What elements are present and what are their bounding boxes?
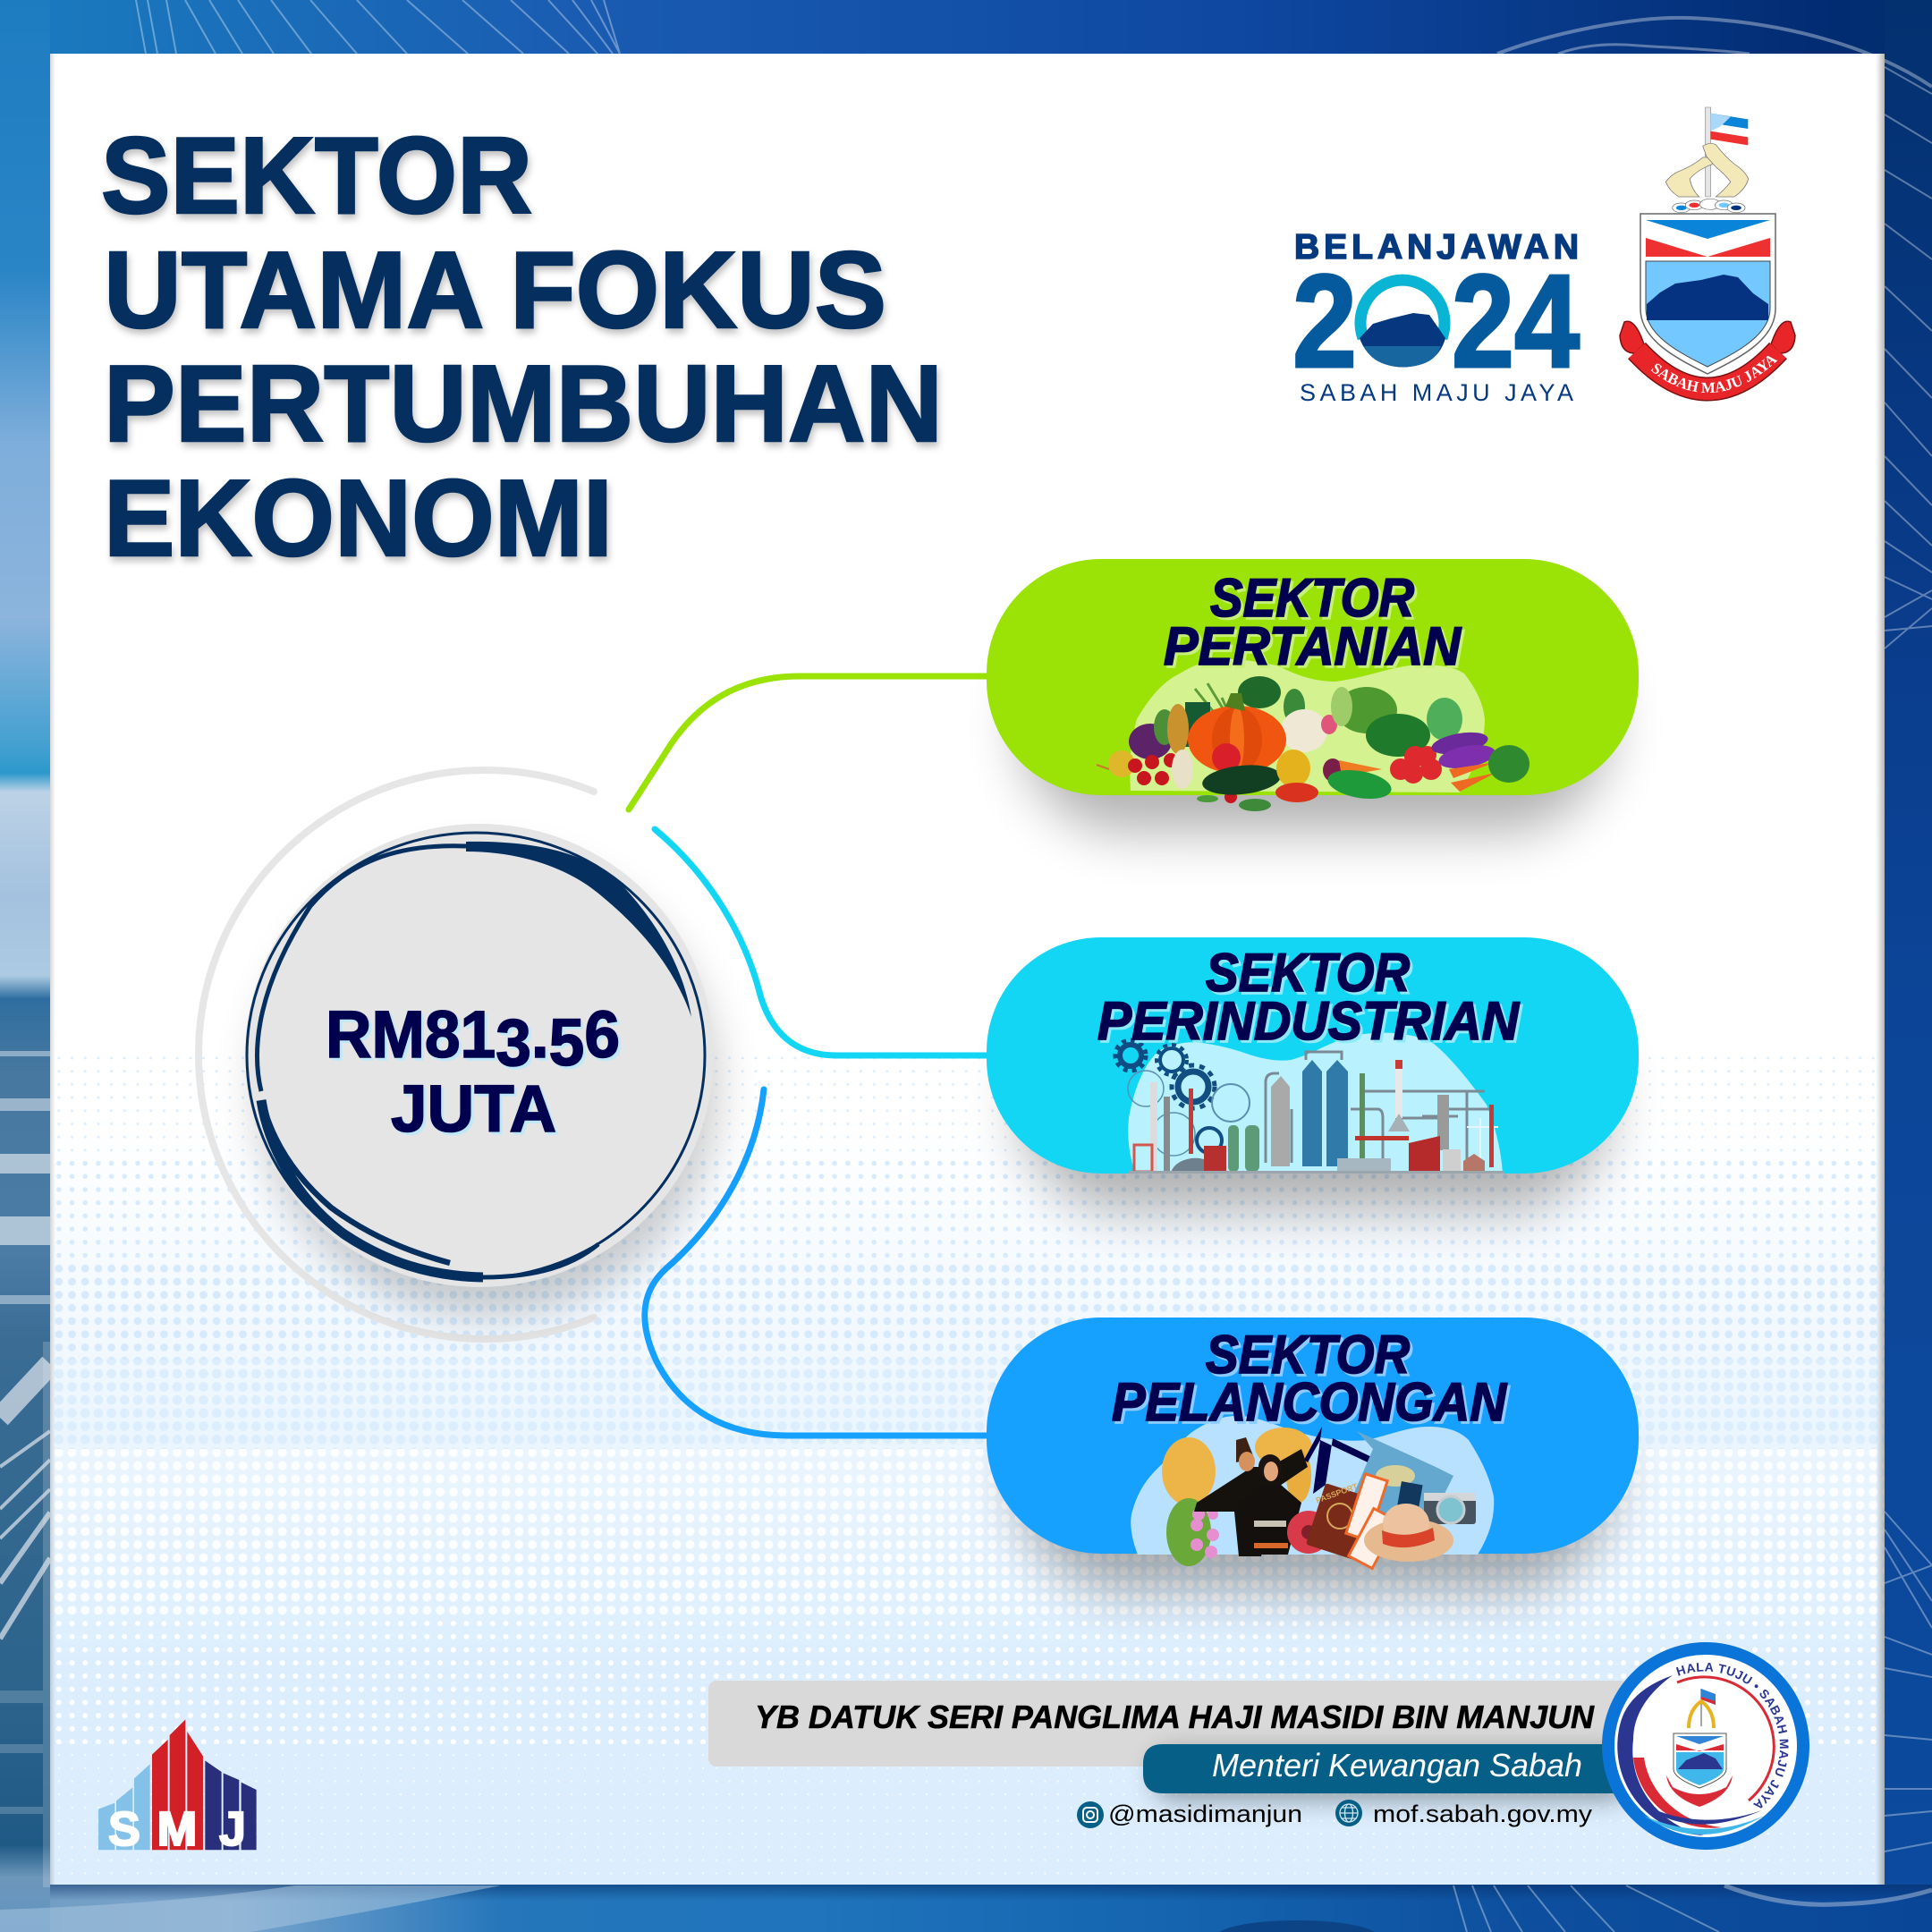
logo: Hala Tuju Sabah Maju Jaya: HALA TUJU • SABAH MAJU JAYA xyxy=(1676,1663,1789,1809)
panel: Sektor Pelancongan: PELANCONGAN xyxy=(1112,1372,1508,1432)
footer: minister name bar: YB DATUK SERI PANGLIMA HAJI MASIDI BIN MANJUN xyxy=(755,1699,1595,1735)
logo: Sabah coat of arms xyxy=(1619,107,1796,401)
connector: green xyxy=(629,676,987,809)
title: EKONOMI xyxy=(104,457,613,579)
illustration: vegetables xyxy=(1097,676,1530,811)
connector: cyan xyxy=(655,829,987,1055)
panel: Sektor Pertanian: PERTANIAN xyxy=(1164,616,1462,676)
crest arms and flag xyxy=(1665,107,1749,213)
amount text: 6 xyxy=(584,997,620,1072)
logo: Hala Tuju Sabah Maju Jaya xyxy=(1602,1642,1809,1850)
title xyxy=(101,114,943,579)
panel: Sektor Pelancongan: SEKTOR xyxy=(1206,1325,1410,1385)
illustration: factory xyxy=(1115,1040,1504,1174)
title: SEKTOR xyxy=(101,114,532,236)
footer: minister role bar: Menteri Kewangan Sabah xyxy=(1212,1747,1582,1784)
title: UTAMA FOKUS xyxy=(104,229,886,351)
amount text: RM81 xyxy=(326,997,502,1072)
footer: social handle: @masidimanjun xyxy=(1108,1801,1302,1827)
logo: SMJ: J xyxy=(219,1802,246,1856)
central circle: total amount xyxy=(199,770,718,1339)
logo: SMJ: S xyxy=(108,1802,140,1856)
shield xyxy=(1640,214,1775,374)
panel: Sektor Pertanian xyxy=(987,559,1639,832)
panel: Sektor Perindustrian: SEKTOR xyxy=(1206,943,1410,1003)
amount text: . xyxy=(531,997,549,1072)
footer: website: mof.sabah.gov.my xyxy=(1373,1801,1593,1827)
amount text: 5 xyxy=(549,1005,584,1080)
ribbon xyxy=(1619,320,1796,401)
logo: Belanjawan 2024: 2 xyxy=(1292,248,1357,395)
navy scribble xyxy=(247,833,705,1278)
amount text: 3 xyxy=(496,1005,531,1080)
title: PERTUMBUHAN xyxy=(104,343,943,464)
logo: SMJ: M xyxy=(157,1802,197,1856)
amount text: JUTA xyxy=(391,1072,556,1146)
illustration: tourism collage xyxy=(1162,1427,1476,1569)
logo: Belanjawan 2024: BELANJAWAN xyxy=(1294,228,1579,267)
logo: Belanjawan 2024: 2 xyxy=(1452,248,1514,395)
outer grey ring xyxy=(199,770,594,1339)
illustration: tourism collage: PASSPORT xyxy=(1315,1481,1360,1505)
ribbon: SABAH MAJU JAYA xyxy=(1651,356,1778,393)
panel: Sektor Perindustrian xyxy=(987,937,1639,1210)
amount text xyxy=(326,997,620,1146)
logo: Belanjawan 2024: 4 xyxy=(1514,248,1580,395)
connector: blue xyxy=(645,1089,987,1436)
logo: SMJ xyxy=(98,1719,257,1856)
footer: minister role bar xyxy=(1143,1744,1630,1801)
logo: Belanjawan 2024 xyxy=(1292,228,1580,406)
panel: Sektor Perindustrian: PERINDUSTRIAN xyxy=(1097,991,1521,1051)
mini crest xyxy=(1666,1689,1733,1807)
logo: Belanjawan 2024: SABAH MAJU JAYA xyxy=(1300,379,1573,406)
footer: minister name bar xyxy=(708,1681,1630,1767)
panel: Sektor Pelancongan xyxy=(987,1318,1639,1590)
panel: Sektor Pertanian: SEKTOR xyxy=(1210,568,1414,628)
